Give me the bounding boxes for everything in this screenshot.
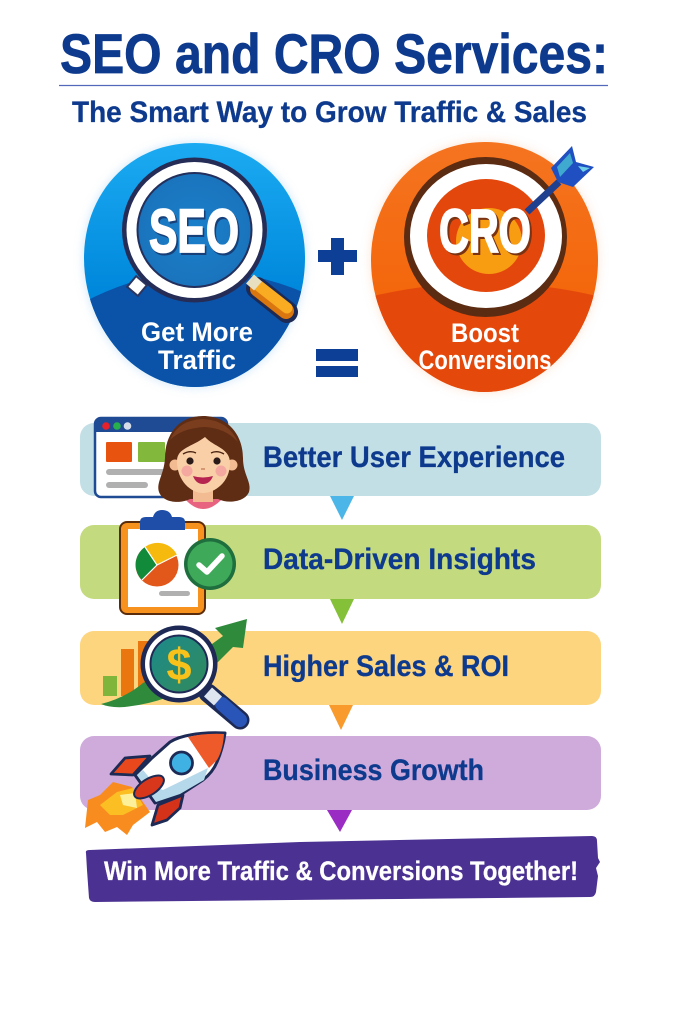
- icon: growth magnifier: [101, 619, 247, 720]
- icon: growth magnifier: $: [166, 639, 192, 690]
- arrow: orange: [329, 705, 353, 730]
- icon: rocket: [85, 733, 225, 835]
- banner: call to action: [86, 836, 600, 902]
- panel: data-driven insights: [80, 510, 601, 624]
- icon: SEO magnifying glass: [122, 158, 287, 312]
- panel: CRO circle: [365, 142, 605, 395]
- panel: business growth: [80, 733, 601, 835]
- infographic canvas: [59, 32, 608, 902]
- label: get more traffic: Get More: [141, 317, 253, 347]
- label: get more traffic: [141, 317, 253, 375]
- title: SEO and CRO Services:: [60, 22, 608, 85]
- label: boost conversions: [418, 318, 552, 375]
- panel: SEO circle: [84, 143, 310, 395]
- icon: arrow: [527, 146, 594, 212]
- label: boost conversions: Conversions: [418, 345, 552, 375]
- heading: better user experience: Better User Experience: [263, 441, 565, 474]
- icon: clipboard report: [120, 510, 236, 614]
- plus sign: [318, 238, 357, 275]
- icon: SEO magnifying glass: SEO: [149, 197, 239, 265]
- icon: SEO magnifying glass: SEO: [150, 199, 240, 267]
- icon: browser window: [95, 418, 227, 497]
- heading: business growth: Business Growth: [263, 754, 484, 787]
- arrow: purple: [327, 810, 352, 832]
- banner: call to action: Win More Traffic & Conversions Together!: [104, 856, 578, 886]
- label: get more traffic: Traffic: [158, 345, 236, 375]
- heading: higher sales and ROI: Higher Sales & ROI: [263, 650, 509, 683]
- panel: better user experience: [80, 416, 601, 520]
- icon: woman face: [158, 416, 250, 509]
- icon: target: CRO: [441, 199, 533, 267]
- label: boost conversions: Boost: [451, 318, 519, 348]
- equals sign: [316, 349, 358, 377]
- arrow: blue: [330, 496, 354, 520]
- arrow: green: [330, 599, 354, 624]
- icon: target: CRO: [439, 197, 531, 265]
- heading: data-driven insights: Data-Driven Insights: [263, 543, 536, 576]
- subtitle: The Smart Way to Grow Traffic & Sales: [72, 96, 587, 129]
- panel: higher sales and ROI: [80, 619, 601, 730]
- icon: target: [404, 146, 594, 317]
